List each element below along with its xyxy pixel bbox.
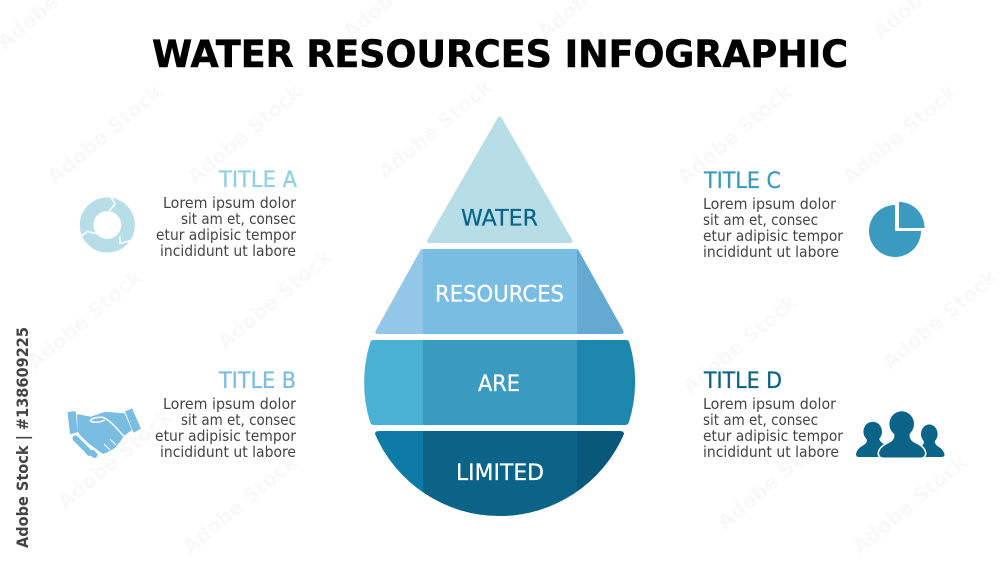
block: title C: TITLE C xyxy=(703,169,781,194)
drop layer: limited xyxy=(370,431,627,519)
text: title C body: incididunt ut labore xyxy=(703,243,839,261)
icon: people group xyxy=(856,411,945,458)
drop layer: limited: LIMITED xyxy=(456,460,544,486)
text: title D body: sit am et, consec xyxy=(703,411,818,429)
drop layer: are xyxy=(360,340,637,425)
stock watermark pattern: Adobe Stock xyxy=(43,79,167,189)
icon: cycle arrows xyxy=(82,197,133,246)
title: WATER RESOURCES INFOGRAPHIC xyxy=(152,33,848,76)
text: title B body xyxy=(155,395,297,461)
text: title A body: incididunt ut labore xyxy=(160,242,296,260)
text: title B body: etur adipisic tempor xyxy=(155,427,297,445)
text: title D body xyxy=(703,395,844,461)
stock watermark pattern: Adobe Stock xyxy=(178,449,302,559)
drop layer: resources: RESOURCES xyxy=(435,282,564,308)
text: title A body: etur adipisic tempor xyxy=(156,226,297,244)
drop layer: resources xyxy=(370,249,627,334)
text: title C body: sit am et, consec xyxy=(703,211,818,229)
block: title A: TITLE A xyxy=(218,168,297,193)
stock watermark pattern: Adobe Stock xyxy=(183,79,307,189)
icon: pie chart xyxy=(869,202,924,257)
drop layer: are: ARE xyxy=(478,371,520,397)
block: title C xyxy=(703,169,844,261)
stock watermark pattern: Adobe Stock xyxy=(373,74,497,184)
stock watermark pattern: Adobe Stock xyxy=(713,424,837,534)
stock watermark pattern: Adobe Stock xyxy=(678,289,802,399)
text: title C body: etur adipisic tempor xyxy=(703,227,844,245)
text: title A body: sit am et, consec xyxy=(181,210,296,228)
text: title D body: Lorem ipsum dolor xyxy=(703,395,837,413)
text: title A body xyxy=(156,194,297,260)
text: title B body: incididunt ut labore xyxy=(160,443,296,461)
stock watermark pattern: Adobe Stock xyxy=(878,264,1000,374)
stock watermark pattern: Adobe Stock xyxy=(213,244,337,354)
text: title C body xyxy=(703,195,844,261)
block: title D xyxy=(703,369,844,461)
stock watermark pattern: Adobe Stock xyxy=(53,404,177,514)
text: title A body: Lorem ipsum dolor xyxy=(163,194,297,212)
stock watermark pattern: Adobe Stock xyxy=(23,264,147,374)
block: title B xyxy=(155,369,297,461)
water drop diagram xyxy=(360,118,637,519)
fingers xyxy=(76,438,94,455)
block: title A xyxy=(156,168,297,260)
drop layer: water xyxy=(429,118,570,241)
text: title D body: etur adipisic tempor xyxy=(703,427,844,445)
block: title D: TITLE D xyxy=(703,369,782,394)
drop layer: water: WATER xyxy=(461,206,538,232)
block: title B: TITLE B xyxy=(218,369,296,394)
text: title B body: sit am et, consec xyxy=(181,411,296,429)
icon: handshake xyxy=(68,409,140,455)
text: title C body: Lorem ipsum dolor xyxy=(703,195,837,213)
text: title B body: Lorem ipsum dolor xyxy=(163,395,297,413)
stock watermark pattern: Adobe Stock xyxy=(673,79,797,189)
stock watermark pattern: Adobe Stock xyxy=(848,449,972,559)
stock credit: Adobe Stock | #138609225 xyxy=(13,327,33,548)
stock watermark pattern: Adobe Stock xyxy=(838,79,962,189)
text: title D body: incididunt ut labore xyxy=(703,443,839,461)
